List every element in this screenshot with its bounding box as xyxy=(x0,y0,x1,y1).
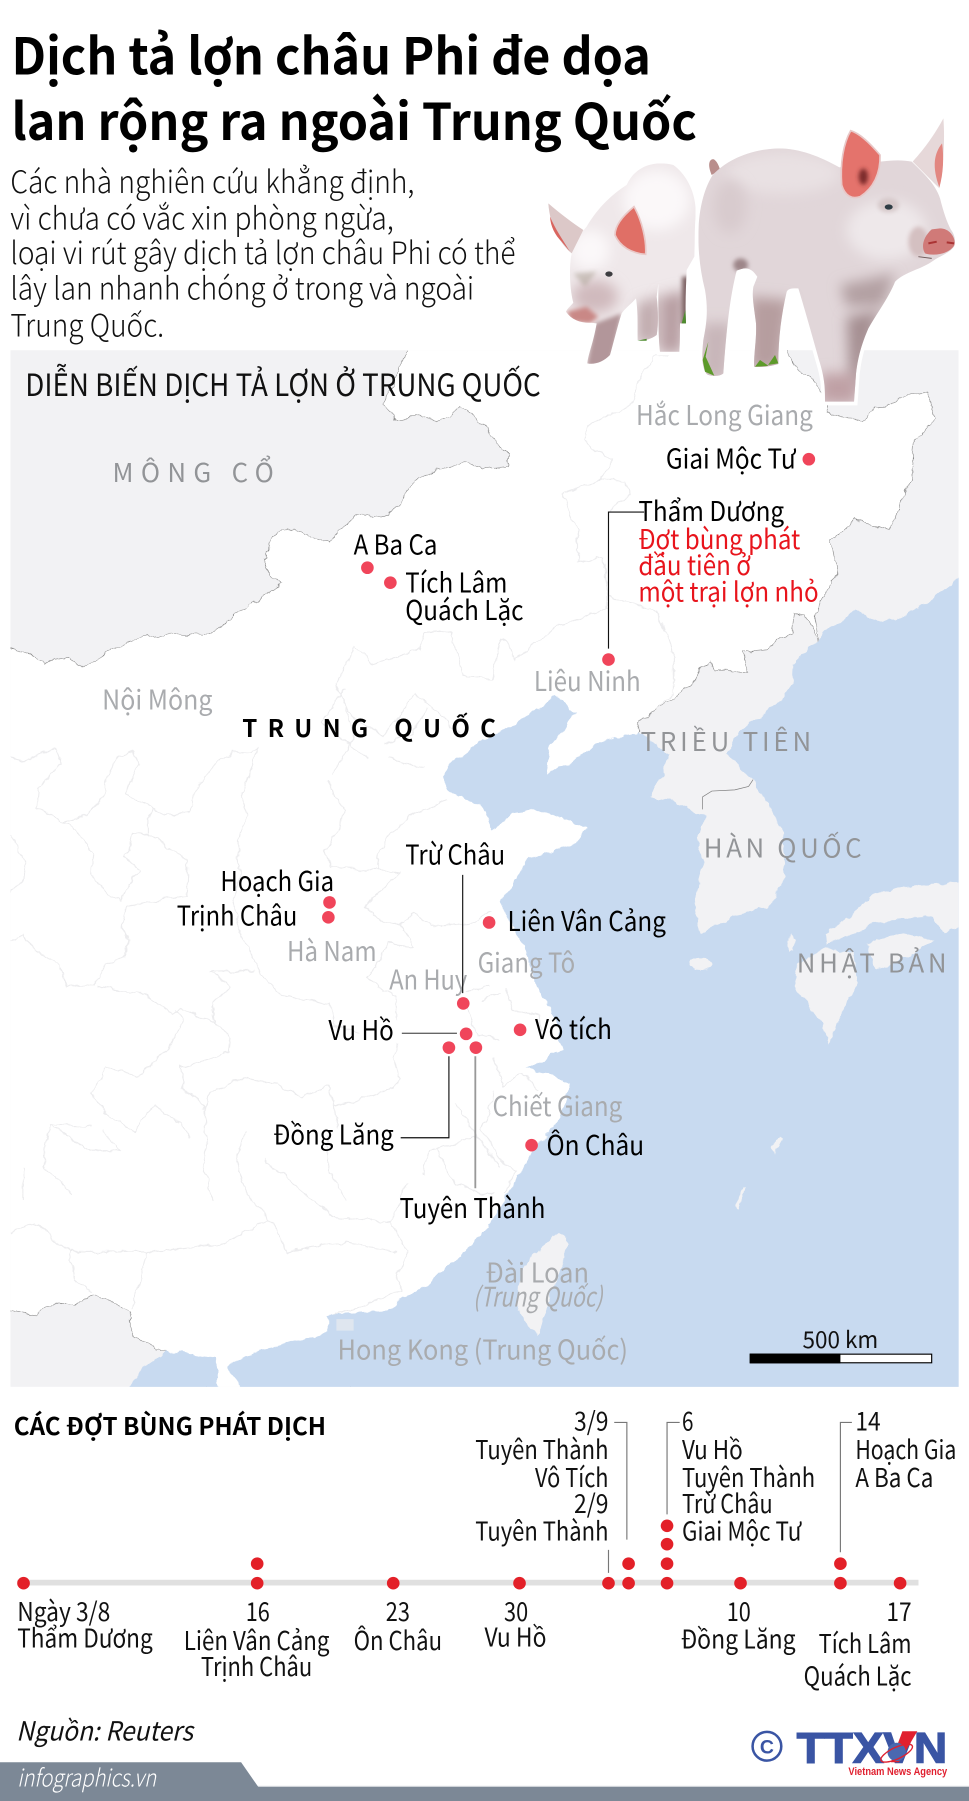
country labels: TRUNG QUỐC xyxy=(242,709,496,744)
timeline labels below: 23 xyxy=(386,1592,410,1629)
intro text block: Trung Quốc. xyxy=(10,300,164,345)
timeline labels below: 10 xyxy=(727,1592,751,1629)
timeline connectors xyxy=(608,1422,852,1573)
city labels: A Ba Ca xyxy=(354,524,437,563)
source: Nguồn: Reuters xyxy=(16,1709,195,1748)
province labels: Hong Kong (Trung Quốc) xyxy=(338,1328,628,1367)
city labels: Liên Vân Cảng xyxy=(507,900,666,939)
intro text block: Các nhà nghiên cứu khẳng định, xyxy=(10,157,414,202)
leader lines xyxy=(401,512,644,1188)
logo: TTXVN xyxy=(753,1724,948,1778)
timeline labels below: Liên Vân Cảng xyxy=(184,1621,330,1658)
city labels: Vô tích xyxy=(535,1008,612,1047)
title: Dịch tả lợn châu Phi đe dọa xyxy=(11,16,651,90)
timeline labels above: Trừ Châu xyxy=(682,1484,773,1521)
province labels: Đài Loan xyxy=(486,1251,589,1290)
timeline labels above: Tuyên Thành xyxy=(475,1430,608,1467)
pig: large, right xyxy=(697,118,960,407)
logo: TTXVN: C xyxy=(760,1737,774,1759)
outbreak dots on map xyxy=(322,453,815,1152)
timeline labels above: Vu Hồ xyxy=(682,1430,743,1467)
map: Japan and islands xyxy=(690,882,969,1210)
timeline labels above: Tuyên Thành xyxy=(475,1512,608,1549)
country labels: TRIỀU TIÊN xyxy=(641,722,816,759)
intro text block: vì chưa có vắc xin phòng ngừa, xyxy=(10,194,394,239)
map: North-South Korea border xyxy=(703,780,753,809)
timeline labels below: Tích Lâm xyxy=(819,1624,912,1661)
timeline labels above: A Ba Ca xyxy=(855,1458,933,1495)
province labels: An Huy xyxy=(389,959,467,998)
city labels: Đồng Lăng xyxy=(273,1114,394,1153)
map title: DIỄN BIẾN DỊCH TẢ LỢN Ở TRUNG QUỐC xyxy=(25,360,541,405)
province labels: Liêu Ninh xyxy=(534,660,641,699)
city labels xyxy=(177,437,796,1226)
city labels: Ôn Châu xyxy=(546,1124,644,1163)
timeline labels below: Ngày 3/8 xyxy=(17,1592,110,1629)
red callout: first outbreak xyxy=(638,518,819,610)
province labels xyxy=(102,394,813,1367)
panel: map of China xyxy=(0,339,969,1401)
timeline labels below: Vu Hồ xyxy=(484,1617,546,1654)
timeline labels below: Đồng Lăng xyxy=(681,1620,796,1657)
province labels: Hắc Long Giang xyxy=(636,394,813,433)
map: Hong Kong marker xyxy=(336,1319,354,1331)
title xyxy=(11,16,697,155)
city labels: Hoạch Gia xyxy=(220,860,334,899)
city labels: Quách Lặc xyxy=(405,589,524,628)
province labels: Hà Nam xyxy=(287,930,377,969)
city labels: Giai Mộc Tư xyxy=(666,437,796,476)
red callout: first outbreak: Đợt bùng phát xyxy=(638,518,800,557)
pigs xyxy=(548,118,960,407)
pig: small, left xyxy=(548,157,700,370)
timeline labels below: 30 xyxy=(504,1592,528,1629)
country labels: NHẬT BẢN xyxy=(797,943,952,980)
province labels: (Trung Quốc) xyxy=(473,1276,604,1315)
timeline xyxy=(17,1402,956,1693)
city labels: Thẩm Dương xyxy=(638,490,784,529)
intro text block: loại vi rút gây dịch tả lợn châu Phi có thể xyxy=(10,228,515,273)
country labels: HÀN QUỐC xyxy=(704,829,867,866)
country labels xyxy=(113,453,952,980)
map: province borders xyxy=(10,350,677,1315)
map: sea xyxy=(121,565,969,1401)
scale bar xyxy=(750,1321,932,1363)
footer bar xyxy=(0,1758,969,1801)
map: Taiwan xyxy=(518,1233,568,1336)
timeline labels below: Quách Lặc xyxy=(804,1656,912,1693)
red callout: first outbreak: đầu tiên ở xyxy=(638,544,751,583)
timeline labels above: 14 xyxy=(855,1402,881,1439)
province labels: Giang Tô xyxy=(478,941,575,980)
intro text block xyxy=(10,157,515,345)
logo: TTXVN: Vietnam News Agency xyxy=(848,1766,948,1778)
province labels: Nội Mông xyxy=(102,679,212,718)
timeline labels above: Vô Tích xyxy=(535,1458,608,1495)
timeline dots xyxy=(17,1519,906,1590)
map: China land xyxy=(0,339,936,1395)
country labels: MÔNG CỔ xyxy=(113,453,279,490)
city labels: Trịnh Châu xyxy=(177,894,297,933)
province labels: Chiết Giang xyxy=(493,1085,622,1124)
scale bar: 500 km xyxy=(803,1321,878,1355)
timeline labels below: 17 xyxy=(886,1592,912,1629)
timeline labels above xyxy=(475,1402,956,1549)
timeline heading: CÁC ĐỢT BÙNG PHÁT DỊCH xyxy=(14,1407,326,1442)
city labels: Trừ Châu xyxy=(405,834,505,873)
title: lan rộng ra ngoài Trung Quốc xyxy=(11,81,697,155)
timeline labels above: Giai Mộc Tư xyxy=(682,1512,803,1549)
timeline labels below: Trịnh Châu xyxy=(201,1647,312,1684)
timeline labels above: 6 xyxy=(682,1402,693,1439)
timeline labels below xyxy=(17,1592,912,1693)
timeline labels below: 16 xyxy=(246,1592,270,1629)
city labels: Vu Hồ xyxy=(328,1009,394,1048)
timeline labels above: 3/9 xyxy=(574,1402,608,1439)
red callout: first outbreak: một trại lợn nhỏ xyxy=(638,571,819,610)
timeline labels below: Ôn Châu xyxy=(354,1621,442,1658)
intro text block: lây lan nhanh chóng ở trong và ngoài xyxy=(10,264,474,309)
timeline labels above: 2/9 xyxy=(574,1484,608,1521)
timeline labels below: Thẩm Dương xyxy=(17,1619,153,1656)
logo: TTXVN: TTXVN xyxy=(797,1724,947,1771)
city labels: Tuyên Thành xyxy=(400,1187,545,1226)
timeline labels above: Tuyên Thành xyxy=(682,1458,815,1495)
footer bar: infographics.vn xyxy=(17,1758,157,1793)
city labels: Tích Lâm xyxy=(405,561,507,600)
